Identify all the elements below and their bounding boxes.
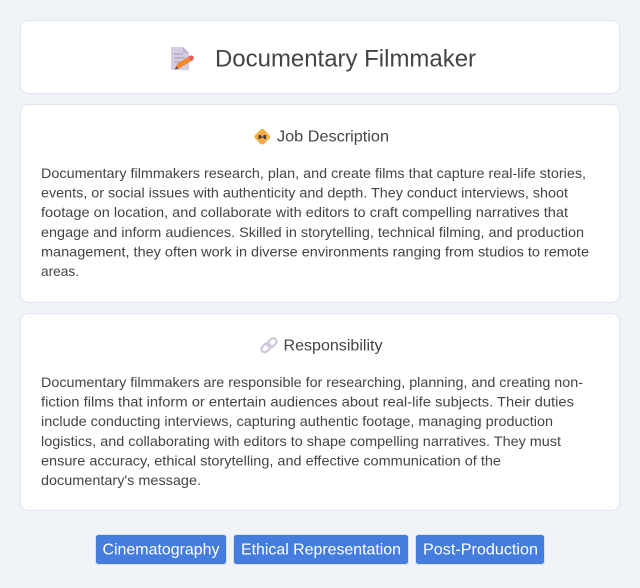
text block: job description: events, or social issues with authenticity and depth. They conduct interviews, shoot (41, 185, 568, 201)
text block: responsibility: fiction films that inform or entertain audiences about real-life subjects. Their duties (41, 394, 574, 410)
heading: responsibility: Responsibility (284, 338, 382, 354)
text block: responsibility: logistics, and collaborating with editors to shape compelling narratives. They must (41, 433, 561, 449)
panel: job description (20, 104, 620, 302)
text block: job description (41, 165, 589, 279)
text block: job description: management, they often work in diverse environments ranging from studios to remote (41, 243, 589, 259)
text block: responsibility (41, 374, 583, 488)
tag: ethical representation: Ethical Representation (241, 542, 401, 558)
text block: responsibility: Documentary filmmakers are responsible for researching, planning, and creating non- (41, 374, 583, 390)
tag: ethical representation (234, 534, 408, 564)
skill tags (96, 534, 544, 564)
text block: job description: areas. (41, 263, 79, 279)
tag: cinematography (96, 534, 226, 564)
tag: cinematography: Cinematography (102, 542, 220, 558)
panel: header (20, 20, 620, 94)
text block: responsibility: include conducting interviews, capturing authentic footage, managing production (41, 413, 553, 429)
tag: post-production (416, 534, 544, 564)
icon: chain link (260, 337, 278, 354)
icon: document with pencil (171, 47, 194, 70)
icon: orange diamond sign (253, 128, 271, 146)
text block: job description: Documentary filmmakers research, plan, and create films that capture real-life stories, (41, 165, 586, 181)
text block: responsibility: documentary's message. (41, 472, 201, 488)
title: Documentary Filmmaker (215, 46, 476, 72)
heading: job description: Job Description (277, 128, 389, 146)
text block: job description: engage and inform audiences. Skilled in storytelling, technical filming, and production (41, 224, 584, 240)
text block: job description: footage on location, and collaborate with editors to craft compelling narratives that (41, 204, 568, 220)
text block: responsibility: ensure accuracy, ethical storytelling, and effective communication of the (41, 452, 501, 468)
panel: responsibility (20, 314, 620, 510)
tag: post-production: Post-Production (423, 542, 538, 558)
